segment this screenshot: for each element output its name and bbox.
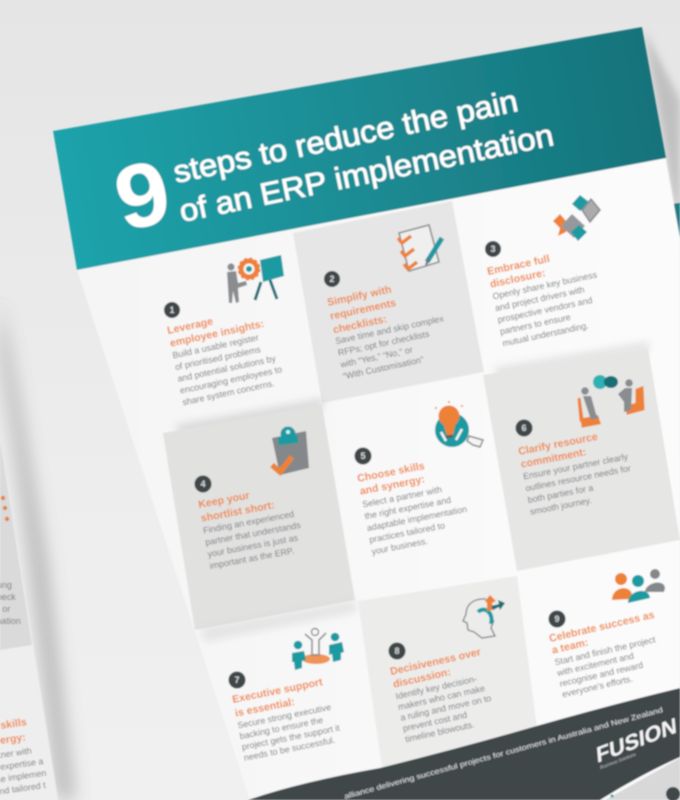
step 8 text: prevent cost and xyxy=(402,710,468,734)
step 3 text: partners to ensure xyxy=(499,312,572,337)
step 9 text: Celebrate success as xyxy=(548,609,656,645)
step 5 text: Choose skills xyxy=(356,460,426,485)
number badge 6 xyxy=(516,420,532,436)
step 7 xyxy=(228,628,344,763)
number badge 4 xyxy=(194,476,212,492)
logo: Fusion: Business Solutions xyxy=(600,751,637,770)
step 5 text: the right expertise and xyxy=(364,495,452,521)
step 4 text: partner that understands xyxy=(204,520,302,547)
number badge 4: 4 xyxy=(200,479,206,489)
step 7 text: backing to ensure the xyxy=(239,715,324,741)
step 5 text: your business. xyxy=(371,536,429,557)
number badge 7: 7 xyxy=(234,675,240,685)
step 7 text: Secure strong executive xyxy=(237,702,332,730)
step 6 text: outlines resource needs for xyxy=(525,463,632,493)
step 7 text: project gets the support it xyxy=(241,723,341,752)
step 9 text: a team: xyxy=(551,637,590,657)
number badge 5: 5 xyxy=(360,451,366,461)
step 1 xyxy=(164,255,285,407)
step 8 text: Decisiveness over xyxy=(389,646,482,678)
step 7 text: needs to be successful. xyxy=(243,735,336,763)
icon: team of three xyxy=(612,569,665,603)
grey cell 6 xyxy=(483,348,680,571)
step 5 text: practices tailored to xyxy=(368,520,446,545)
step 7 text: is essential: xyxy=(234,696,296,720)
step 7 text: Executive support xyxy=(231,676,324,706)
step 2 text: RFPs; opt for checklists xyxy=(337,329,431,358)
step 3 text xyxy=(486,244,608,348)
step 8 text: Identify key decision- xyxy=(395,674,478,701)
step 3 text: prospective vendors and xyxy=(497,295,593,325)
step 9 text: recognise and reward xyxy=(559,660,644,689)
step 2 text: “With Customisation” xyxy=(342,354,425,381)
grey cell 8 xyxy=(358,576,537,768)
step 4 text: shortlist short: xyxy=(200,499,276,525)
number badge 3: 3 xyxy=(490,244,496,254)
step 8 text: timeline blowouts. xyxy=(404,719,475,744)
step 3 text: Openly share key business xyxy=(492,269,598,301)
step 8 xyxy=(388,595,505,744)
step 6 text: commitment: xyxy=(520,446,587,471)
step 1 text: and potential solutions by xyxy=(177,353,277,384)
step 1 text xyxy=(166,304,285,407)
step 1 text: Leverage xyxy=(166,316,214,337)
step 2 text: Save time and skip complex xyxy=(334,313,445,346)
step 8 text: a ruling and move on to xyxy=(399,693,492,723)
step 4 xyxy=(194,426,309,571)
number badge 8: 8 xyxy=(394,646,400,656)
background below footer xyxy=(605,758,680,800)
step 3 text: disclosure: xyxy=(489,267,547,291)
number badge 5 xyxy=(354,448,372,464)
icon: clipboard with tick xyxy=(272,426,309,475)
step 5 text: and synergy: xyxy=(359,473,426,498)
icon: handshake xyxy=(553,195,600,241)
step 1 text: employee insights: xyxy=(169,318,265,350)
step 6 text: both parties for a xyxy=(527,483,594,505)
left background page xyxy=(0,300,74,800)
step 8 text: discussion: xyxy=(392,666,452,691)
step 6 text: Ensure your partner clearly xyxy=(522,451,629,482)
step 5 xyxy=(354,401,483,557)
shadow above cell 4 xyxy=(175,398,325,436)
step 6 xyxy=(516,375,643,517)
number badge 9: 9 xyxy=(554,614,560,624)
step 9 xyxy=(547,569,668,700)
step 1 text: Build a usable register xyxy=(172,332,260,360)
step 2 text: with “Yes,” “No,” or xyxy=(338,344,414,370)
step 8 text: makers who can make xyxy=(397,683,486,712)
footer band xyxy=(248,688,680,800)
step 3 text: mutual understanding. xyxy=(502,320,590,348)
icon: checklist and pencil xyxy=(398,225,442,271)
icon: presenter with gear xyxy=(227,255,284,303)
shadow above cell 6 xyxy=(495,342,650,378)
step 5 text xyxy=(356,454,472,557)
number badge 1 xyxy=(164,302,180,318)
step 9 text: everyone’s efforts. xyxy=(561,674,634,699)
step 2 text: checklists: xyxy=(332,313,388,336)
step 5 text: Select a partner with xyxy=(361,484,443,509)
step 3 text: and project drivers with xyxy=(494,284,585,313)
number badge 3 xyxy=(485,241,501,257)
icon: head with arrows xyxy=(463,595,505,638)
number badge 2: 2 xyxy=(329,274,335,284)
step 5 text: adaptable implementation xyxy=(366,504,468,533)
icon: executive group xyxy=(292,628,344,670)
step 2 text xyxy=(325,274,453,382)
step 8 text xyxy=(389,646,497,744)
number badge 8 xyxy=(388,642,406,660)
step 3 xyxy=(485,195,608,348)
grey cell 4 xyxy=(163,405,355,630)
step 4 text xyxy=(197,481,306,571)
step 4 text: important as the ERP. xyxy=(209,545,295,571)
title text: steps to reduce the pain xyxy=(170,83,521,190)
step 2 xyxy=(324,225,453,382)
step 3 text: Embrace full xyxy=(486,253,551,278)
footer text: alliance delivering successful projects for customers in Australia and New Zealand xyxy=(343,705,664,800)
step 2 text: requirements xyxy=(329,297,397,323)
grey cell 2 xyxy=(293,201,484,403)
step 1 text: share system concerns. xyxy=(182,378,275,407)
shadow under cell 4 xyxy=(200,600,357,642)
header banner xyxy=(53,27,666,270)
step 9 text: Start and finish the project xyxy=(554,634,657,667)
step 6 text xyxy=(517,426,636,517)
step 1 text: of prioritised problems xyxy=(174,344,262,372)
step 9 text: with excitement and xyxy=(555,651,635,678)
step 9 text xyxy=(547,609,668,700)
numeral nine: 9 xyxy=(106,142,179,251)
number badge 2 xyxy=(324,271,340,287)
step 6 text: Clarify resource xyxy=(517,431,599,458)
step 7 text xyxy=(231,675,343,763)
number badge 1: 1 xyxy=(169,305,175,315)
icon: two people talking xyxy=(579,375,643,426)
step 1 text: encouraging employees to xyxy=(179,364,283,396)
title text: of an ERP implementation xyxy=(176,117,557,229)
icon: lightbulb in hand xyxy=(435,401,483,447)
step 6 text: smooth journey. xyxy=(529,495,592,517)
step 4 text: Finding an experienced xyxy=(202,509,295,536)
badge on the page beneath xyxy=(666,787,680,800)
step 4 text: your business is just as xyxy=(207,532,299,559)
number badge 6: 6 xyxy=(521,423,527,433)
second page teal strip xyxy=(672,203,680,240)
title text xyxy=(170,83,557,229)
logo: Fusion: FUSION xyxy=(595,713,678,768)
step 4 text: Keep your xyxy=(197,490,250,511)
step 2 text: Simplify with xyxy=(326,284,393,309)
